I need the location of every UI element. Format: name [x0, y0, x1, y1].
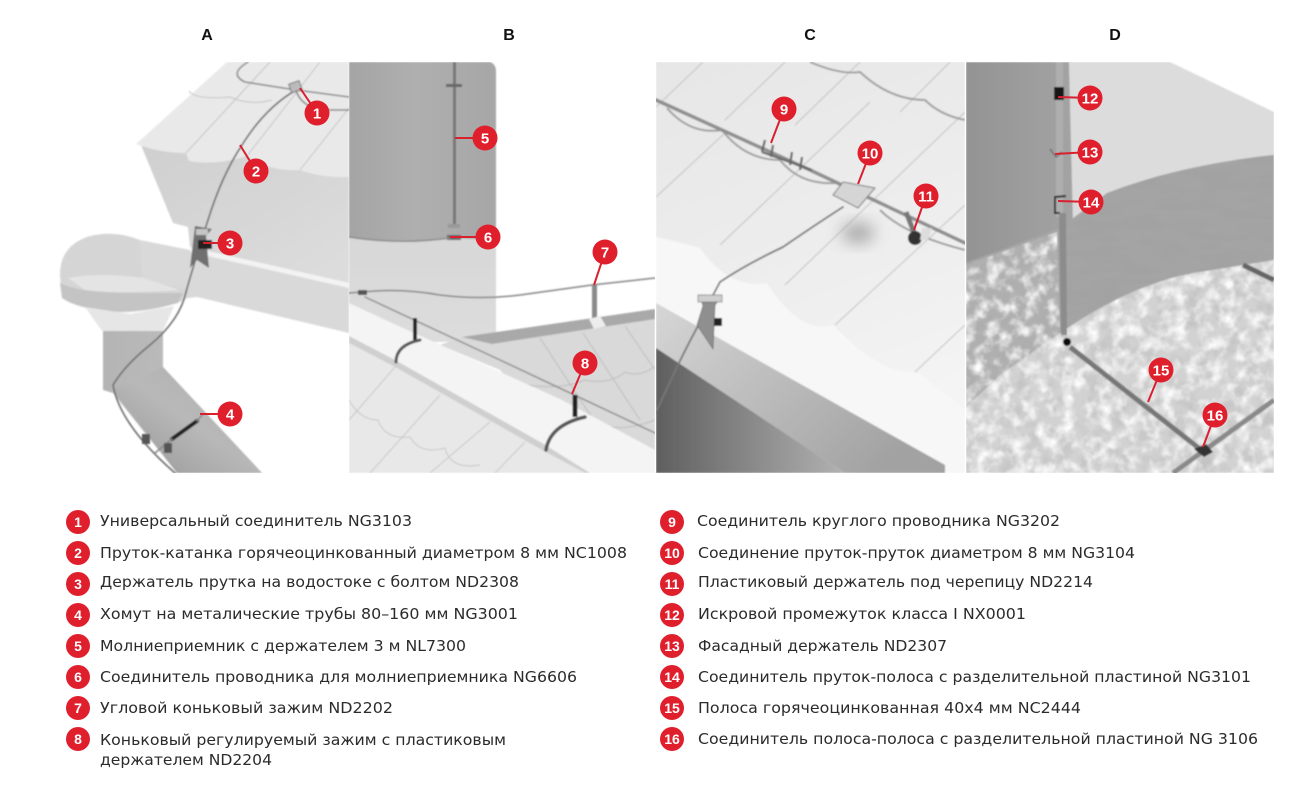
callout 2: 2	[252, 164, 260, 180]
strip far	[1243, 265, 1274, 280]
legend item 12: Искровой промежуток класса I NX0001	[698, 605, 1026, 623]
panel D: wall and earthing strip	[966, 62, 1274, 473]
legend item 16	[660, 727, 1258, 751]
callout 10	[858, 140, 882, 184]
chimney wall	[349, 238, 496, 342]
near roof	[349, 343, 585, 473]
tile joints	[656, 62, 965, 372]
legend item 10: 10	[664, 545, 680, 561]
vertical strip	[1059, 213, 1067, 335]
legend item 12	[660, 603, 1026, 627]
legend item 11: 11	[665, 576, 680, 592]
legend item 3: 3	[74, 576, 82, 592]
callout 8	[572, 350, 598, 394]
legend item 9	[660, 510, 1060, 534]
far roof	[440, 316, 655, 473]
connector 6	[448, 224, 460, 228]
dark wall	[966, 62, 1073, 263]
callout 5	[455, 126, 498, 150]
funnel	[85, 306, 174, 331]
legend item 6	[66, 665, 577, 689]
legend item 14: 14	[664, 669, 680, 685]
legend item 14: Соединитель пруток-полоса с разделительной пластиной NG3101	[698, 668, 1251, 686]
clip 9	[762, 140, 812, 170]
strip crossing	[1173, 400, 1274, 473]
legend item 15: Полоса горячеоцинкованная 40x4 мм NC2444	[698, 699, 1081, 717]
legend right	[660, 510, 1258, 751]
strip bend	[1063, 338, 1071, 346]
callout 3	[203, 230, 242, 256]
gutter end bowl	[60, 234, 190, 312]
callout 3: 3	[226, 236, 234, 252]
gutter band	[656, 303, 945, 473]
legend item 12: 12	[664, 607, 680, 623]
legend item 10	[660, 541, 1135, 565]
callout 6	[450, 224, 500, 250]
conductor wire	[113, 90, 296, 473]
wire from rod	[349, 237, 450, 241]
legend item 3: Держатель прутка на водостоке с болтом ND2308	[100, 573, 519, 591]
callout 9: 9	[780, 102, 788, 118]
holder 13	[1050, 149, 1062, 157]
legend item 7: Угловой коньковый зажим ND2202	[100, 699, 393, 717]
callout 16: 16	[1207, 408, 1223, 424]
main conductor	[656, 100, 965, 243]
lower left insulation light	[966, 232, 1060, 407]
legend item 1: Универсальный соединитель NG3103	[100, 512, 412, 530]
connector 10	[833, 182, 875, 208]
legend item 14	[660, 665, 1251, 689]
legend item 8: держателем ND2204	[100, 751, 272, 769]
callout 2	[240, 145, 268, 184]
heading: B: B	[503, 27, 515, 44]
legend item 2	[66, 541, 627, 565]
legend item 8: 8	[74, 731, 82, 747]
eave highlight	[656, 238, 784, 338]
legend item 5	[66, 634, 466, 658]
legend item 6: 6	[74, 669, 82, 685]
floor gravel	[966, 155, 1274, 473]
callout 8: 8	[581, 356, 589, 372]
callout 4	[200, 402, 242, 426]
panel B: chimney and ridge	[349, 62, 655, 473]
panel C: roof edge detail	[656, 62, 965, 473]
vertical rod	[1056, 62, 1063, 217]
gutter clamp 3	[190, 226, 212, 268]
callout 5: 5	[481, 130, 489, 148]
callout 13: 13	[1082, 144, 1098, 162]
callout 15	[1148, 358, 1174, 402]
strip 15	[1070, 347, 1205, 453]
legend item 13: Фасадный держатель ND2307	[698, 637, 947, 655]
legend item 7	[66, 696, 393, 720]
legend item 9: 9	[668, 514, 676, 530]
connector 1	[289, 81, 302, 93]
heading: A: A	[201, 27, 213, 44]
legend item 5: 5	[74, 638, 82, 654]
callout 11: 11	[918, 188, 934, 206]
far roof tile lines	[528, 326, 655, 430]
legend item 4: Хомут на металические трубы 80–160 мм NG3001	[100, 605, 518, 623]
legend item 4	[66, 603, 518, 627]
legend item 11	[660, 572, 1093, 596]
legend item 5: Молниеприемник с держателем 3 м NL7300	[100, 637, 466, 655]
legend item 16: 16	[664, 731, 680, 747]
callout 4: 4	[226, 406, 235, 424]
roof tiles	[136, 62, 349, 177]
rod 5	[453, 62, 456, 227]
legend item 8: Коньковый регулируемый зажим с пластиковым	[100, 731, 506, 749]
legend item 4: 4	[74, 607, 82, 623]
tile scallops	[667, 62, 965, 250]
legend item 7: 7	[74, 700, 82, 716]
pipe clamp 4	[172, 421, 197, 439]
background wall	[1069, 62, 1274, 230]
callout 13	[1055, 140, 1102, 164]
callout 14	[1058, 190, 1104, 214]
legend item 10: Соединение пруток-пруток диаметром 8 мм NG3104	[698, 544, 1135, 562]
callout 10: 10	[862, 146, 878, 162]
spark gap 12	[1054, 87, 1064, 100]
legend item 13	[660, 634, 947, 658]
connector 16	[1194, 444, 1213, 457]
dark fascia	[656, 348, 845, 473]
gutter clamp lower	[697, 295, 722, 349]
clip 11	[906, 212, 932, 245]
clamp 7	[589, 285, 606, 329]
heading: D: D	[1109, 27, 1121, 44]
legend item 9: Соединитель круглого проводника NG3202	[697, 512, 1060, 530]
branch conductor	[656, 207, 843, 412]
heading: C: C	[804, 27, 816, 44]
callout 1: 1	[313, 106, 321, 122]
legend item 8	[66, 727, 506, 769]
connector 14	[1055, 196, 1066, 213]
legend item 1: 1	[74, 514, 82, 530]
roof tile joints	[186, 62, 349, 170]
ridge tube	[349, 303, 655, 473]
insulation band	[966, 155, 1274, 407]
callout 7	[592, 240, 618, 285]
callout 12: 12	[1082, 90, 1098, 108]
legend item 11: Пластиковый держатель под черепицу ND2214	[698, 573, 1093, 591]
fascia under roof	[141, 145, 349, 283]
callout 1	[300, 88, 330, 126]
legend item 2: 2	[74, 545, 82, 561]
legend item 2: Пруток-катанка горячеоцинкованный диаметром 8 мм NC1008	[100, 544, 627, 562]
callout 14: 14	[1083, 194, 1100, 212]
callout 16	[1202, 402, 1228, 447]
callout 12	[1058, 86, 1102, 110]
ridge clamp left	[396, 318, 420, 362]
callout 7: 7	[601, 244, 609, 262]
ridge conductor wire	[349, 278, 655, 298]
legend left	[66, 510, 627, 769]
callout 11	[914, 184, 938, 230]
clamp shadow	[842, 223, 874, 243]
ridge clamp 8	[546, 395, 585, 450]
legend item 3	[66, 572, 519, 596]
callout 9	[771, 96, 796, 143]
roof surface	[656, 62, 965, 408]
downpipe	[103, 331, 262, 473]
legend item 16: Соединитель полоса-полоса с разделительной пластиной NG 3106	[698, 730, 1258, 748]
legend item 15: 15	[664, 700, 680, 716]
near roof scallops	[349, 367, 525, 473]
callout 6: 6	[484, 230, 492, 246]
panel A: gutter and downpipe	[60, 62, 349, 473]
gutter channel	[140, 240, 349, 333]
legend item 6: Соединитель проводника для молниеприемника NG6606	[100, 668, 577, 686]
legend item 15	[660, 696, 1081, 720]
legend item 13: 13	[664, 638, 680, 654]
callout 15: 15	[1153, 362, 1169, 380]
legend item 1	[66, 510, 412, 534]
